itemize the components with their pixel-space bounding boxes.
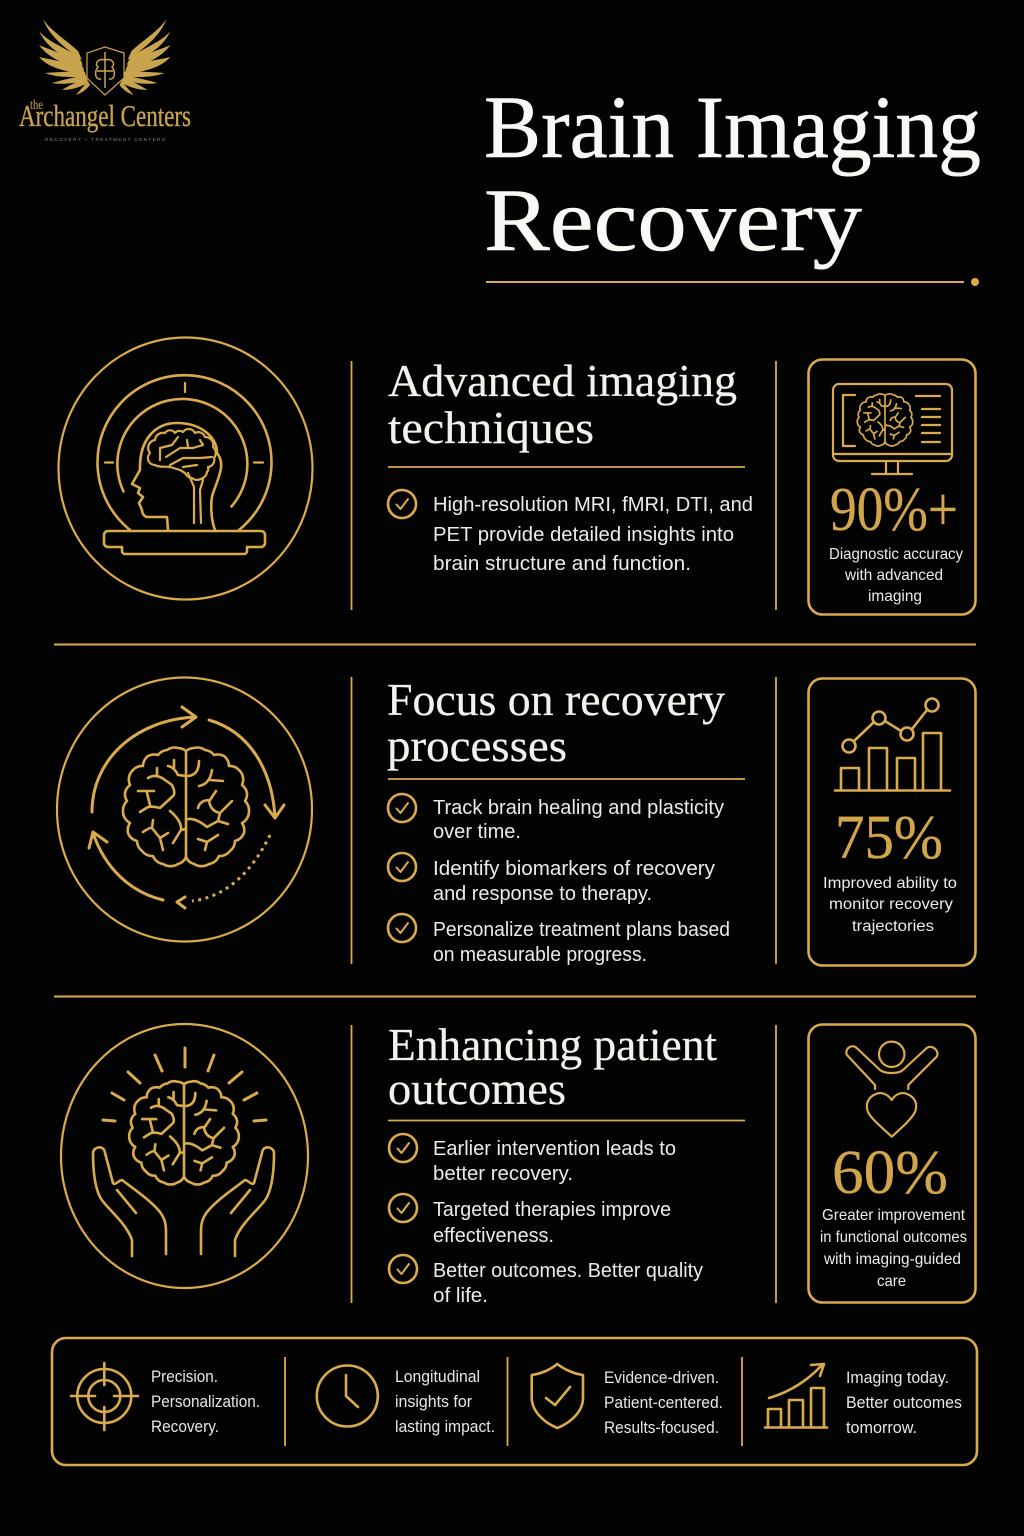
divider	[352, 1025, 776, 1303]
bullet list: better recovery.	[433, 1162, 573, 1185]
icon: line and bar chart	[835, 698, 950, 790]
bullet list: over time.	[433, 820, 521, 843]
bullet list: of life.	[433, 1284, 488, 1307]
stat card: 90%+: 90%+	[830, 476, 958, 544]
panel: enhancing patient outcomes	[61, 1019, 976, 1307]
bullet list	[388, 794, 730, 966]
footer item: longitudinal: insights for	[395, 1392, 472, 1411]
divider	[352, 677, 776, 964]
stat card: 75%: 75%	[835, 804, 943, 872]
bullet list: on measurable progress.	[433, 943, 647, 966]
icon: monitor with brain	[833, 384, 952, 474]
logo: The Archangel Centers	[19, 19, 191, 143]
footer item: evidence: Results-focused.	[604, 1418, 719, 1437]
logo wordmark	[19, 98, 191, 143]
footer item: evidence	[532, 1364, 723, 1437]
logo wordmark: the	[30, 98, 43, 113]
bullet list: Track brain healing and plasticity	[433, 796, 725, 819]
footer item: precision: Personalization.	[151, 1392, 260, 1411]
footer item: evidence: Evidence-driven.	[604, 1368, 719, 1387]
icon: logo shield	[87, 47, 124, 95]
heading: Focus on recovery	[387, 674, 725, 725]
stat card: 75%	[808, 678, 976, 966]
heading: processes	[387, 720, 567, 771]
icon: brain scanner	[58, 338, 312, 600]
footer item: imaging today: Better outcomes	[846, 1393, 962, 1412]
footer item: imaging today	[765, 1364, 962, 1437]
footer item: precision: Precision.	[151, 1367, 218, 1386]
bullet list: Earlier intervention leads to	[433, 1137, 676, 1160]
panel: advanced imaging techniques	[58, 338, 976, 614]
divider line	[54, 644, 976, 646]
footer item: imaging today: Imaging today.	[846, 1368, 949, 1387]
icon: hands holding brain	[61, 1024, 308, 1288]
title: Brain Imaging	[484, 79, 981, 177]
heading: Enhancing patient	[388, 1019, 717, 1070]
stat card: 90%+: imaging	[868, 588, 922, 605]
panel: footer summary	[52, 1338, 977, 1465]
stat card: 75%: monitor recovery	[829, 896, 953, 913]
logo wordmark: RECOVERY + TREATMENT CENTERS	[45, 137, 165, 143]
stat card: 60%	[808, 1024, 976, 1302]
stat card: 60%: 60%	[832, 1139, 948, 1207]
bullet: PET provide detailed insights into	[433, 523, 734, 546]
stat card: 60%: in functional outcomes	[820, 1229, 967, 1246]
title	[484, 79, 981, 286]
icon: target	[71, 1363, 138, 1430]
footer item: imaging today: tomorrow.	[846, 1418, 917, 1437]
logo wordmark: Archangel Centers	[19, 98, 191, 133]
footer item: precision: Recovery.	[151, 1417, 219, 1436]
bullet list	[389, 1134, 704, 1307]
divider	[352, 361, 776, 610]
heading: outcomes	[388, 1063, 566, 1114]
footer item: evidence: Patient-centered.	[604, 1393, 723, 1412]
footer item: longitudinal: lasting impact.	[395, 1417, 495, 1436]
stat card: 60%: Greater improvement	[822, 1207, 966, 1224]
icon: growth chart	[765, 1364, 827, 1428]
bullet list: Better outcomes. Better quality	[433, 1259, 704, 1282]
stat card: 75%: Improved ability to	[823, 875, 957, 892]
stat card: 90%+	[808, 360, 976, 614]
title: Recovery	[484, 172, 863, 270]
icon: shield check	[532, 1364, 583, 1428]
heading: Advanced imaging	[388, 355, 737, 406]
bullet list: and response to therapy.	[433, 882, 652, 905]
icon: brain with recovery cycle	[57, 678, 312, 942]
bullet	[388, 490, 753, 575]
bullet list: Targeted therapies improve	[433, 1198, 671, 1221]
bullet list: Identify biomarkers of recovery	[433, 857, 716, 880]
divider line	[54, 996, 976, 998]
bullet list: Personalize treatment plans based	[433, 918, 730, 941]
stat card: 60%: care	[877, 1273, 906, 1290]
icon: person with heart	[846, 1042, 937, 1137]
stat card: 75%: trajectories	[852, 918, 934, 935]
icon: clock	[317, 1366, 378, 1426]
heading	[387, 674, 745, 779]
stat card: 90%+: with advanced	[844, 567, 943, 584]
stat card: 90%+: Diagnostic accuracy	[829, 546, 963, 563]
footer item: longitudinal: Longitudinal	[395, 1367, 480, 1386]
icon: logo wings	[39, 19, 170, 95]
footer item: precision	[71, 1363, 260, 1436]
heading	[388, 355, 745, 467]
stat card: 60%: with imaging-guided	[823, 1251, 961, 1268]
heading	[388, 1019, 745, 1120]
bullet: High-resolution MRI, fMRI, DTI, and	[433, 493, 753, 516]
panel: focus on recovery processes	[57, 674, 976, 966]
footer item: longitudinal	[317, 1366, 495, 1436]
heading: techniques	[388, 402, 594, 453]
bullet: brain structure and function.	[433, 552, 691, 575]
bullet list: effectiveness.	[433, 1224, 554, 1247]
